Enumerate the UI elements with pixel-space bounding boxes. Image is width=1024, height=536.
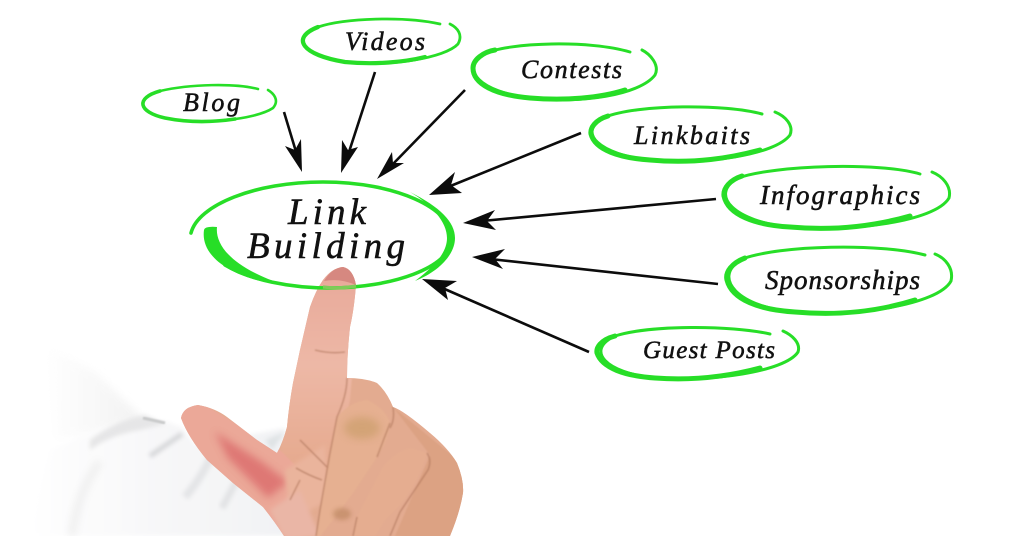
fingertip over ellipse bbox=[324, 267, 356, 285]
hand: knuckle shadow bbox=[344, 417, 380, 439]
ellipse: Guest Posts bbox=[597, 327, 799, 379]
main ellipse: Link Building bbox=[191, 182, 455, 288]
hand: middle finger bbox=[317, 408, 348, 535]
hand pointing at Link Building bbox=[170, 260, 470, 536]
arrow from Videos bbox=[341, 72, 375, 173]
hand: finger creases bbox=[290, 350, 430, 536]
ellipse: Infographics bbox=[724, 166, 950, 228]
ellipse: Contests bbox=[473, 44, 656, 100]
label: Infographics bbox=[759, 180, 920, 210]
shirt sleeve bbox=[25, 345, 290, 536]
label: Contests bbox=[521, 55, 622, 84]
arrow from Infographics bbox=[463, 199, 716, 230]
ellipse line crossing finger bbox=[323, 286, 356, 288]
arrow from Guest Posts bbox=[422, 279, 589, 352]
arrow from Sponsorships bbox=[472, 249, 718, 284]
ellipse: Sponsorships bbox=[727, 247, 952, 313]
arrow from Contests bbox=[377, 90, 465, 179]
ellipse: Blog bbox=[143, 85, 276, 122]
arrow from Linkbaits bbox=[429, 133, 581, 195]
label: Videos bbox=[345, 27, 425, 56]
hand: lower thumb base bbox=[272, 494, 316, 536]
label: Blog bbox=[183, 88, 240, 117]
arrow from Blog bbox=[284, 112, 302, 172]
label: Linkbaits bbox=[633, 121, 750, 150]
hand: ring finger bbox=[353, 448, 427, 536]
arrows into Link Building bbox=[284, 72, 718, 352]
label: Guest Posts bbox=[643, 337, 775, 364]
hand: palm folds bbox=[284, 450, 326, 508]
label: Sponsorships bbox=[765, 265, 920, 295]
label: Building bbox=[247, 226, 405, 267]
ellipse: Linkbaits bbox=[591, 107, 791, 161]
hand: back of hand bbox=[396, 411, 464, 536]
hand: thumb bbox=[181, 405, 290, 533]
ellipse: Videos bbox=[303, 19, 460, 63]
hand: base skin bbox=[170, 260, 470, 536]
hand: index finger bbox=[281, 267, 356, 444]
label: Link bbox=[287, 192, 367, 233]
hand: thumb redness bbox=[215, 432, 288, 498]
